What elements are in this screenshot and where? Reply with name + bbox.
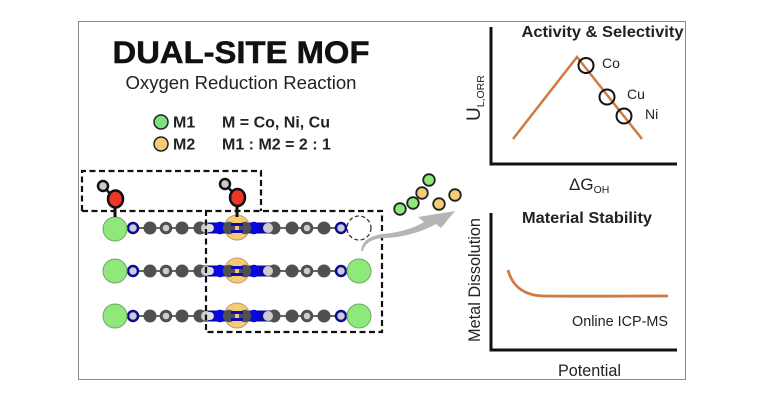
chart title: Activity & Selectivity <box>522 24 684 41</box>
subtitle: Oxygen Reduction Reaction <box>126 73 356 93</box>
legend: M1 marker <box>154 115 168 129</box>
dissolved ions <box>394 174 461 215</box>
x-axis label: OH <box>594 184 609 196</box>
chart: material stability <box>465 210 677 380</box>
x-axis label: Potential <box>558 361 621 380</box>
legend: M2 marker <box>154 137 168 151</box>
chain row 1 <box>115 215 359 240</box>
y-axis label: U <box>464 107 485 121</box>
MOF structure <box>98 179 371 328</box>
legend: M composition: M = Co, Ni, Cu <box>222 114 330 132</box>
x-axis label: ΔG <box>569 175 594 194</box>
Ni point <box>616 108 632 124</box>
dashed box: top <box>82 171 261 211</box>
technique label: Online ICP-MS <box>572 314 668 330</box>
dissolution curve <box>508 270 668 296</box>
chart axes <box>491 213 677 350</box>
y-axis label: L,ORR <box>475 75 487 107</box>
Ni label: Ni <box>645 106 658 122</box>
frame <box>78 22 686 380</box>
Cu label: Cu <box>627 86 645 102</box>
legend: M2 label: M2 <box>173 136 195 154</box>
chain row 2 <box>115 258 359 283</box>
chart: activity and selectivity <box>464 24 684 196</box>
chart axes <box>491 27 677 164</box>
legend: ratio: M1 : M2 = 2 : 1 <box>222 136 331 154</box>
dashed line: top box base <box>82 210 206 212</box>
vacancy <box>347 216 371 240</box>
OH adsorbate right <box>220 179 245 217</box>
chain row 3 <box>115 303 359 328</box>
dissolution arrow <box>361 211 455 251</box>
Co label: Co <box>602 55 620 71</box>
OH adsorbate left <box>98 181 123 217</box>
Cu point <box>600 90 614 104</box>
M1 atoms right <box>347 259 371 328</box>
title: DUAL-SITE MOF <box>112 34 370 70</box>
M1 atoms left <box>103 217 127 328</box>
y-axis label: Metal Dissolution <box>465 218 484 342</box>
Co point <box>578 58 594 73</box>
legend: M1 label: M1 <box>173 114 195 132</box>
volcano line <box>513 57 642 139</box>
chart title: Material Stability <box>522 210 652 227</box>
dashed box: right <box>206 211 382 332</box>
legend <box>154 114 331 154</box>
